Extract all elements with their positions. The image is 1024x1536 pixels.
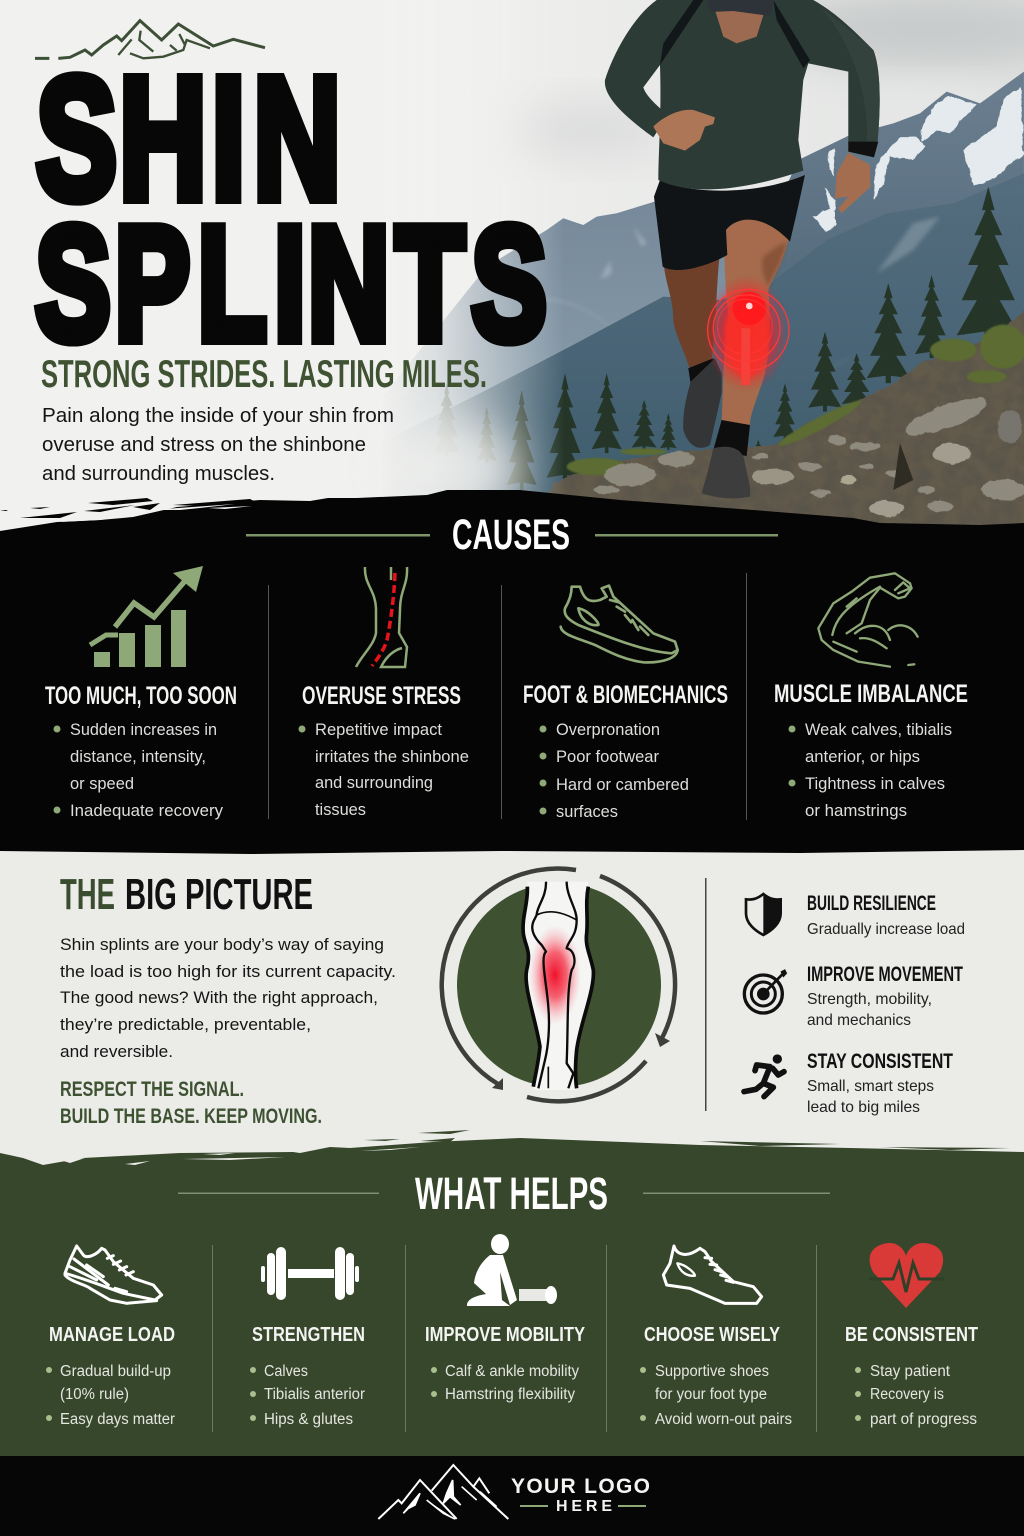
shirt bbox=[605, 0, 880, 189]
green callout text: RESPECT THE SIGNAL. bbox=[60, 1078, 244, 1101]
column: be consistent: part of progress bbox=[870, 1411, 977, 1428]
item: build resilience bbox=[807, 892, 965, 938]
column: too much, too soon: TOO MUCH, TOO SOON bbox=[45, 682, 237, 710]
icon: flexed arm bbox=[818, 573, 918, 667]
intro text: Pain along the inside of your shin from bbox=[42, 404, 394, 427]
item: stay consistent: lead to big miles bbox=[807, 1099, 920, 1116]
icon: shoe with stripes bbox=[65, 1246, 162, 1303]
column: muscle imbalance: anterior, or hips bbox=[805, 747, 920, 766]
column: improve mobility: Calf & ankle mobility bbox=[445, 1363, 579, 1380]
column: overuse stress: tissues bbox=[315, 800, 366, 819]
panel: causes bbox=[0, 490, 1024, 854]
column: too much, too soon: Sudden increases in bbox=[70, 720, 217, 739]
column: too much, too soon: Inadequate recovery bbox=[70, 801, 223, 820]
front leg bbox=[722, 218, 789, 425]
column: overuse stress: OVERUSE STRESS bbox=[302, 682, 461, 710]
column: muscle imbalance: Weak calves, tibialis bbox=[805, 720, 952, 739]
icon: runner bbox=[744, 1054, 784, 1097]
column: choose wisely bbox=[640, 1324, 792, 1428]
paragraph: The good news? With the right approach, bbox=[60, 988, 378, 1007]
column: strengthen: STRENGTHEN bbox=[252, 1324, 365, 1346]
fist bbox=[653, 110, 715, 151]
column: foot and biomechanics: Overpronation bbox=[556, 720, 660, 739]
icon: running shoe outline bbox=[561, 586, 678, 662]
column: foot and biomechanics: FOOT & BIOMECHANICS bbox=[523, 681, 728, 709]
vertical divider bbox=[705, 878, 706, 1111]
column dividers bbox=[268, 573, 747, 820]
column: manage load: Gradual build-up bbox=[60, 1363, 171, 1380]
column: strengthen: Hips & glutes bbox=[264, 1411, 353, 1428]
column: muscle imbalance: Tightness in calves bbox=[805, 774, 945, 793]
column: foot and biomechanics: Hard or cambered bbox=[556, 775, 689, 794]
column dividers bbox=[212, 1245, 817, 1432]
item: build resilience: Gradually increase load bbox=[807, 921, 965, 938]
tagline: STRONG STRIDES. LASTING MILES. bbox=[41, 353, 487, 396]
footer logo mountains bbox=[378, 1465, 508, 1519]
snow patches bbox=[813, 87, 1024, 232]
column: too much, too soon: distance, intensity, bbox=[70, 747, 206, 766]
icon: heart with pulse bbox=[869, 1243, 944, 1308]
panel: the big picture bbox=[60, 869, 965, 1128]
paragraph: Shin splints are your body’s way of saying bbox=[60, 935, 384, 954]
shorts bbox=[654, 175, 805, 270]
column: be consistent: Stay patient bbox=[870, 1363, 951, 1380]
column: choose wisely: Supportive shoes bbox=[655, 1363, 769, 1380]
column: be consistent: BE CONSISTENT bbox=[845, 1324, 978, 1346]
heading: the big picture: THE bbox=[60, 870, 115, 919]
intro text: and surrounding muscles. bbox=[42, 462, 275, 485]
column: overuse stress: and surrounding bbox=[315, 773, 433, 792]
paragraph: the load is too high for its current capacity. bbox=[60, 962, 396, 981]
top mountain logo mark bbox=[35, 21, 265, 58]
icon: lower leg with stress line bbox=[356, 567, 407, 667]
leg diagram in circle with cycle arrows bbox=[442, 869, 675, 1101]
paragraph bbox=[60, 935, 396, 1061]
footer band bbox=[0, 1456, 1024, 1536]
column: choose wisely: CHOOSE WISELY bbox=[644, 1324, 781, 1346]
rear leg bbox=[664, 253, 720, 370]
column: foot and biomechanics: Poor footwear bbox=[556, 747, 659, 766]
column: strengthen bbox=[250, 1324, 365, 1428]
icon: shield bbox=[746, 894, 781, 935]
column: manage load: (10% rule) bbox=[60, 1386, 129, 1403]
left fog fade bbox=[380, 226, 560, 497]
item: improve movement bbox=[807, 963, 963, 1029]
column: improve mobility: IMPROVE MOBILITY bbox=[425, 1324, 586, 1346]
column: strengthen: Calves bbox=[264, 1363, 308, 1380]
item: stay consistent: STAY CONSISTENT bbox=[807, 1050, 953, 1073]
column: strengthen: Tibialis anterior bbox=[264, 1386, 365, 1403]
open hand bbox=[835, 153, 871, 213]
hero photo: mountain trail with runner bbox=[0, 0, 1024, 540]
column: muscle imbalance: or hamstrings bbox=[805, 801, 907, 820]
footer logo text bbox=[511, 1475, 650, 1515]
icon: target bbox=[744, 969, 787, 1013]
paragraph: and reversible. bbox=[60, 1042, 173, 1061]
heading: the big picture bbox=[60, 870, 313, 919]
runner figure bbox=[605, 0, 880, 498]
face and cap bbox=[715, 10, 765, 43]
icon: dumbbell bbox=[261, 1247, 359, 1300]
icon: rising bar chart bbox=[90, 566, 203, 667]
item: stay consistent: Small, smart steps bbox=[807, 1078, 934, 1095]
paragraph: they’re predictable, preventable, bbox=[60, 1015, 311, 1034]
item: improve movement: and mechanics bbox=[807, 1012, 911, 1029]
item: build resilience: BUILD RESILIENCE bbox=[807, 892, 936, 915]
column: muscle imbalance bbox=[774, 680, 968, 820]
column: overuse stress: Repetitive impact bbox=[315, 720, 442, 739]
green callout text bbox=[60, 1078, 322, 1128]
footer logo text: HERE bbox=[556, 1498, 612, 1515]
icon: stretching figure bbox=[467, 1234, 557, 1306]
item: stay consistent bbox=[807, 1050, 953, 1116]
heading: the big picture: BIG PICTURE bbox=[125, 870, 313, 919]
icon: shoe outline bbox=[663, 1246, 762, 1303]
intro text bbox=[42, 404, 394, 485]
title: SHIN bbox=[36, 42, 341, 235]
intro text: overuse and stress on the shinbone bbox=[42, 433, 366, 456]
item: improve movement: Strength, mobility, bbox=[807, 991, 932, 1008]
column: choose wisely: Avoid worn-out pairs bbox=[655, 1411, 792, 1428]
column: be consistent bbox=[845, 1324, 978, 1428]
column: overuse stress: irritates the shinbone bbox=[315, 747, 469, 766]
title bbox=[35, 42, 547, 374]
column: too much, too soon: or speed bbox=[70, 774, 134, 793]
column: manage load: MANAGE LOAD bbox=[49, 1324, 175, 1346]
column: too much, too soon bbox=[45, 682, 237, 820]
column: foot and biomechanics bbox=[523, 681, 728, 821]
section heading: causes: CAUSES bbox=[452, 511, 570, 559]
tree line bbox=[433, 187, 1020, 490]
column: be consistent: Recovery is bbox=[870, 1386, 944, 1403]
column: foot and biomechanics: surfaces bbox=[556, 802, 618, 821]
title: SPLINTS bbox=[35, 194, 547, 374]
column: manage load: Easy days matter bbox=[60, 1411, 175, 1428]
sky and clouds bbox=[544, 0, 1024, 156]
rocky slope bbox=[548, 310, 1024, 525]
column: choose wisely: for your foot type bbox=[655, 1386, 767, 1403]
column: improve mobility bbox=[425, 1324, 586, 1403]
watch bbox=[848, 142, 878, 157]
panel: what helps bbox=[0, 1130, 1024, 1460]
column: manage load bbox=[46, 1324, 175, 1428]
column: improve mobility: Hamstring flexibility bbox=[445, 1386, 575, 1403]
mountains, trees and ground bbox=[380, 72, 1024, 540]
column: overuse stress bbox=[298, 682, 469, 819]
footer logo text: YOUR LOGO bbox=[511, 1475, 650, 1498]
section heading: what helps: WHAT HELPS bbox=[415, 1168, 608, 1219]
knee pain highlight bbox=[705, 275, 789, 392]
green callout text: BUILD THE BASE. KEEP MOVING. bbox=[60, 1105, 322, 1128]
